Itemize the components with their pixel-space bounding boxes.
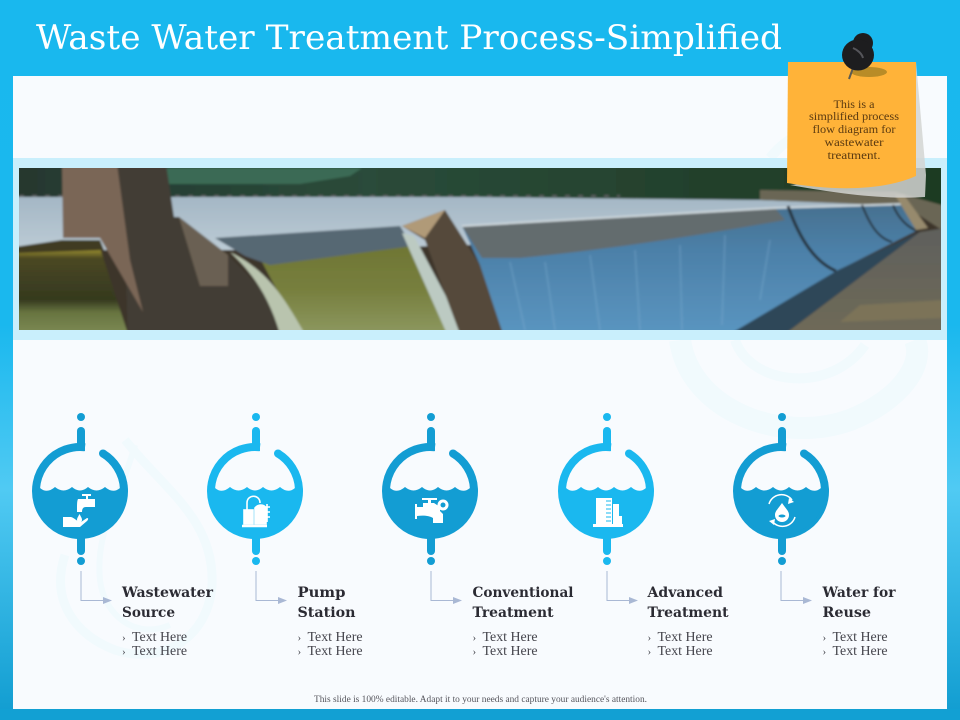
bullets 1: › xyxy=(122,646,126,658)
orb 3 xyxy=(386,413,474,565)
photo: weir line xyxy=(19,195,620,197)
note text: simplified process xyxy=(809,109,899,123)
photo: water streaks xyxy=(510,236,770,320)
photo: river surface xyxy=(15,197,905,250)
heading 5: Water for xyxy=(822,585,896,601)
bullets 1 xyxy=(122,630,187,659)
bullets 3: Text Here xyxy=(482,644,538,659)
heading 3: Conventional xyxy=(472,585,574,601)
note text xyxy=(809,97,899,162)
bullets 2 xyxy=(298,630,362,659)
bullets 2: › xyxy=(298,646,301,658)
bullets 5: › xyxy=(822,632,826,644)
bullets 3: Text Here xyxy=(482,630,538,645)
photo: background trees xyxy=(19,168,941,205)
photo: dark wedge xyxy=(730,232,920,334)
heading 2: Pump xyxy=(298,585,346,601)
photo: end wall xyxy=(895,195,928,230)
bullets 4 xyxy=(648,630,712,659)
orb 4 xyxy=(562,413,650,565)
note text: flow diagram for xyxy=(812,122,896,136)
note text: wastewater xyxy=(824,135,884,149)
photo: dark base xyxy=(99,214,941,330)
title: Waste Water Treatment Process-Simplified xyxy=(36,18,782,58)
bottom frame bar xyxy=(0,709,960,720)
step 2: pump station xyxy=(211,413,362,659)
heading 2: Station xyxy=(298,605,356,621)
photo: grey spillway band xyxy=(462,208,785,258)
photo: river dam spillway xyxy=(15,164,945,334)
photo: apron xyxy=(785,228,945,334)
photo: left waterfall xyxy=(15,248,128,334)
sticky note callout xyxy=(787,33,926,198)
step 4: advanced treatment xyxy=(562,413,729,659)
icon: pump station tanks xyxy=(242,496,270,526)
bullets 3: › xyxy=(472,646,476,658)
connector arrow 5 xyxy=(781,571,812,604)
photo: blue spillway xyxy=(462,204,918,334)
heading 3: Treatment xyxy=(472,605,554,621)
step 1: wastewater source xyxy=(36,413,214,659)
bullets 3: › xyxy=(472,632,476,644)
photo: right bank xyxy=(760,190,945,232)
note text: This is a xyxy=(834,97,875,111)
bullets 4: › xyxy=(648,646,651,658)
photo: apron sediment xyxy=(840,300,945,322)
icon: recycled water drop xyxy=(769,495,795,526)
photo: centre olive waterfall xyxy=(262,246,446,330)
photo: centre crest band xyxy=(215,226,412,265)
connector arrow 2 xyxy=(256,571,287,604)
heading 4: Treatment xyxy=(648,605,729,621)
step 3: conventional treatment xyxy=(386,413,574,659)
icon: valve with gauge xyxy=(415,498,448,523)
faint water swirl watermarks xyxy=(61,124,917,654)
bullets 1: › xyxy=(122,632,126,644)
photo: dark concrete pier xyxy=(118,168,276,330)
heading 4: Advanced xyxy=(646,585,723,601)
orb 2 xyxy=(211,413,299,565)
photo: white water edges xyxy=(230,252,305,334)
photo: left ledge xyxy=(15,240,104,253)
note paper xyxy=(787,62,916,188)
light band behind photo xyxy=(13,158,947,340)
bullets 1: Text Here xyxy=(132,644,187,659)
bullets 5: › xyxy=(822,646,826,658)
bullets 5 xyxy=(822,630,888,659)
bullets 4: › xyxy=(648,632,651,644)
pin needle xyxy=(849,68,853,79)
bullets 2: › xyxy=(298,632,301,644)
photo: distant hills xyxy=(166,168,362,184)
bullets 4: Text Here xyxy=(658,644,712,659)
heading 1: Wastewater xyxy=(121,585,214,601)
bullets 5: Text Here xyxy=(832,644,888,659)
pin head xyxy=(842,33,874,70)
photo: buttress face xyxy=(179,217,228,286)
orb 1 xyxy=(36,413,124,565)
step 5: water for reuse xyxy=(737,413,896,659)
pin shadow xyxy=(851,67,887,77)
connector arrow 1 xyxy=(81,571,112,604)
heading 1: Source xyxy=(122,605,175,621)
bullets 3 xyxy=(472,630,538,659)
icon: treatment towers xyxy=(593,498,623,527)
connector arrow 3 xyxy=(431,571,462,604)
photo: concrete pier lit face xyxy=(62,164,143,312)
bullets 2: Text Here xyxy=(308,630,362,645)
icon: tap and hand xyxy=(63,494,95,527)
bullets 2: Text Here xyxy=(308,644,362,659)
bullets 5: Text Here xyxy=(832,630,888,645)
photo: triangular pier xyxy=(402,210,505,334)
footer note: This slide is 100% editable. Adapt it to your needs and capture your audience's attention. xyxy=(314,694,647,704)
note text: treatment. xyxy=(828,148,880,162)
orb 5 xyxy=(737,413,825,565)
heading 5: Reuse xyxy=(822,605,871,621)
bullets 4: Text Here xyxy=(658,630,712,645)
connector arrow 4 xyxy=(607,571,638,604)
bullets 1: Text Here xyxy=(132,630,187,645)
photo: spillway ribs xyxy=(788,205,918,271)
note curled shadow xyxy=(790,62,926,198)
photo: crest highlight xyxy=(462,204,905,226)
